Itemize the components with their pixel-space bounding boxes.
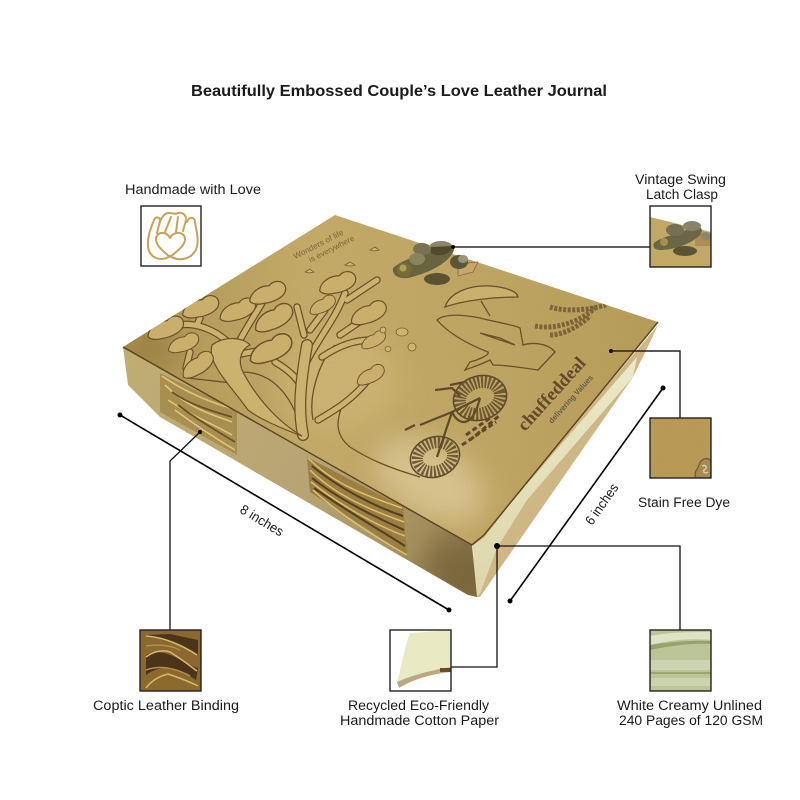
stitching: lower band	[307, 457, 407, 555]
cover logo text: delivering Values	[547, 373, 595, 425]
journal photo	[110, 205, 670, 605]
callout: coptic leather binding	[93, 430, 239, 713]
title: Beautifully Embossed Couple’s Love Leather Journal	[191, 83, 607, 100]
embossed trees in the distance	[535, 305, 606, 335]
callout: white creamy unlined pages	[497, 546, 763, 728]
infographic canvas	[94, 84, 762, 728]
cover edge shading	[123, 322, 658, 545]
callout: white creamy unlined pages: White Creamy Unlined	[617, 698, 762, 713]
thumbnail: binding	[140, 630, 201, 691]
page block	[473, 325, 658, 597]
callout: handmade with love	[125, 182, 261, 266]
callout: stain free dye	[609, 349, 730, 510]
embossed tree	[146, 247, 420, 477]
dimension: 8 inches	[118, 412, 452, 612]
embossed couple under umbrella	[437, 286, 555, 370]
embossed bicycle	[404, 374, 508, 478]
callout: vintage swing latch clasp: Vintage Swing	[635, 172, 726, 187]
icon: hands holding heart	[148, 213, 198, 259]
dimension: 6 inches	[508, 386, 666, 604]
callout: stain free dye: Stain Free Dye	[638, 495, 730, 510]
thumbnail: page edges	[650, 630, 711, 691]
cover	[123, 215, 658, 544]
cover logo text: chuffeddeal	[513, 353, 590, 435]
callout: recycled eco-friendly paper: Handmade Cotton Paper	[340, 713, 500, 728]
thumbnail: paper	[397, 630, 450, 688]
thumbnail: leather	[650, 418, 711, 478]
spine	[123, 348, 477, 597]
dimension: 8 inches: 8 inches	[237, 502, 287, 539]
metal swing latch clasp	[393, 241, 478, 285]
embossed inscription: is everywhere	[307, 233, 356, 264]
dimension: 6 inches: 6 inches	[582, 480, 622, 528]
embossed inscription: Wonders of life	[292, 228, 346, 261]
callout: vintage swing latch clasp	[451, 172, 726, 267]
callout: white creamy unlined pages: 240 Pages of 120 GSM	[619, 713, 763, 728]
callout: recycled eco-friendly paper: Recycled Eco-Friendly	[348, 698, 489, 713]
stitching: upper band	[160, 373, 237, 455]
callout: coptic leather binding: Coptic Leather Binding	[93, 698, 239, 713]
callout: handmade with love: Handmade with Love	[125, 182, 261, 197]
thumbnail: clasp	[650, 217, 710, 266]
callout: recycled eco-friendly paper	[340, 543, 500, 728]
callout: vintage swing latch clasp: Latch Clasp	[646, 187, 718, 202]
